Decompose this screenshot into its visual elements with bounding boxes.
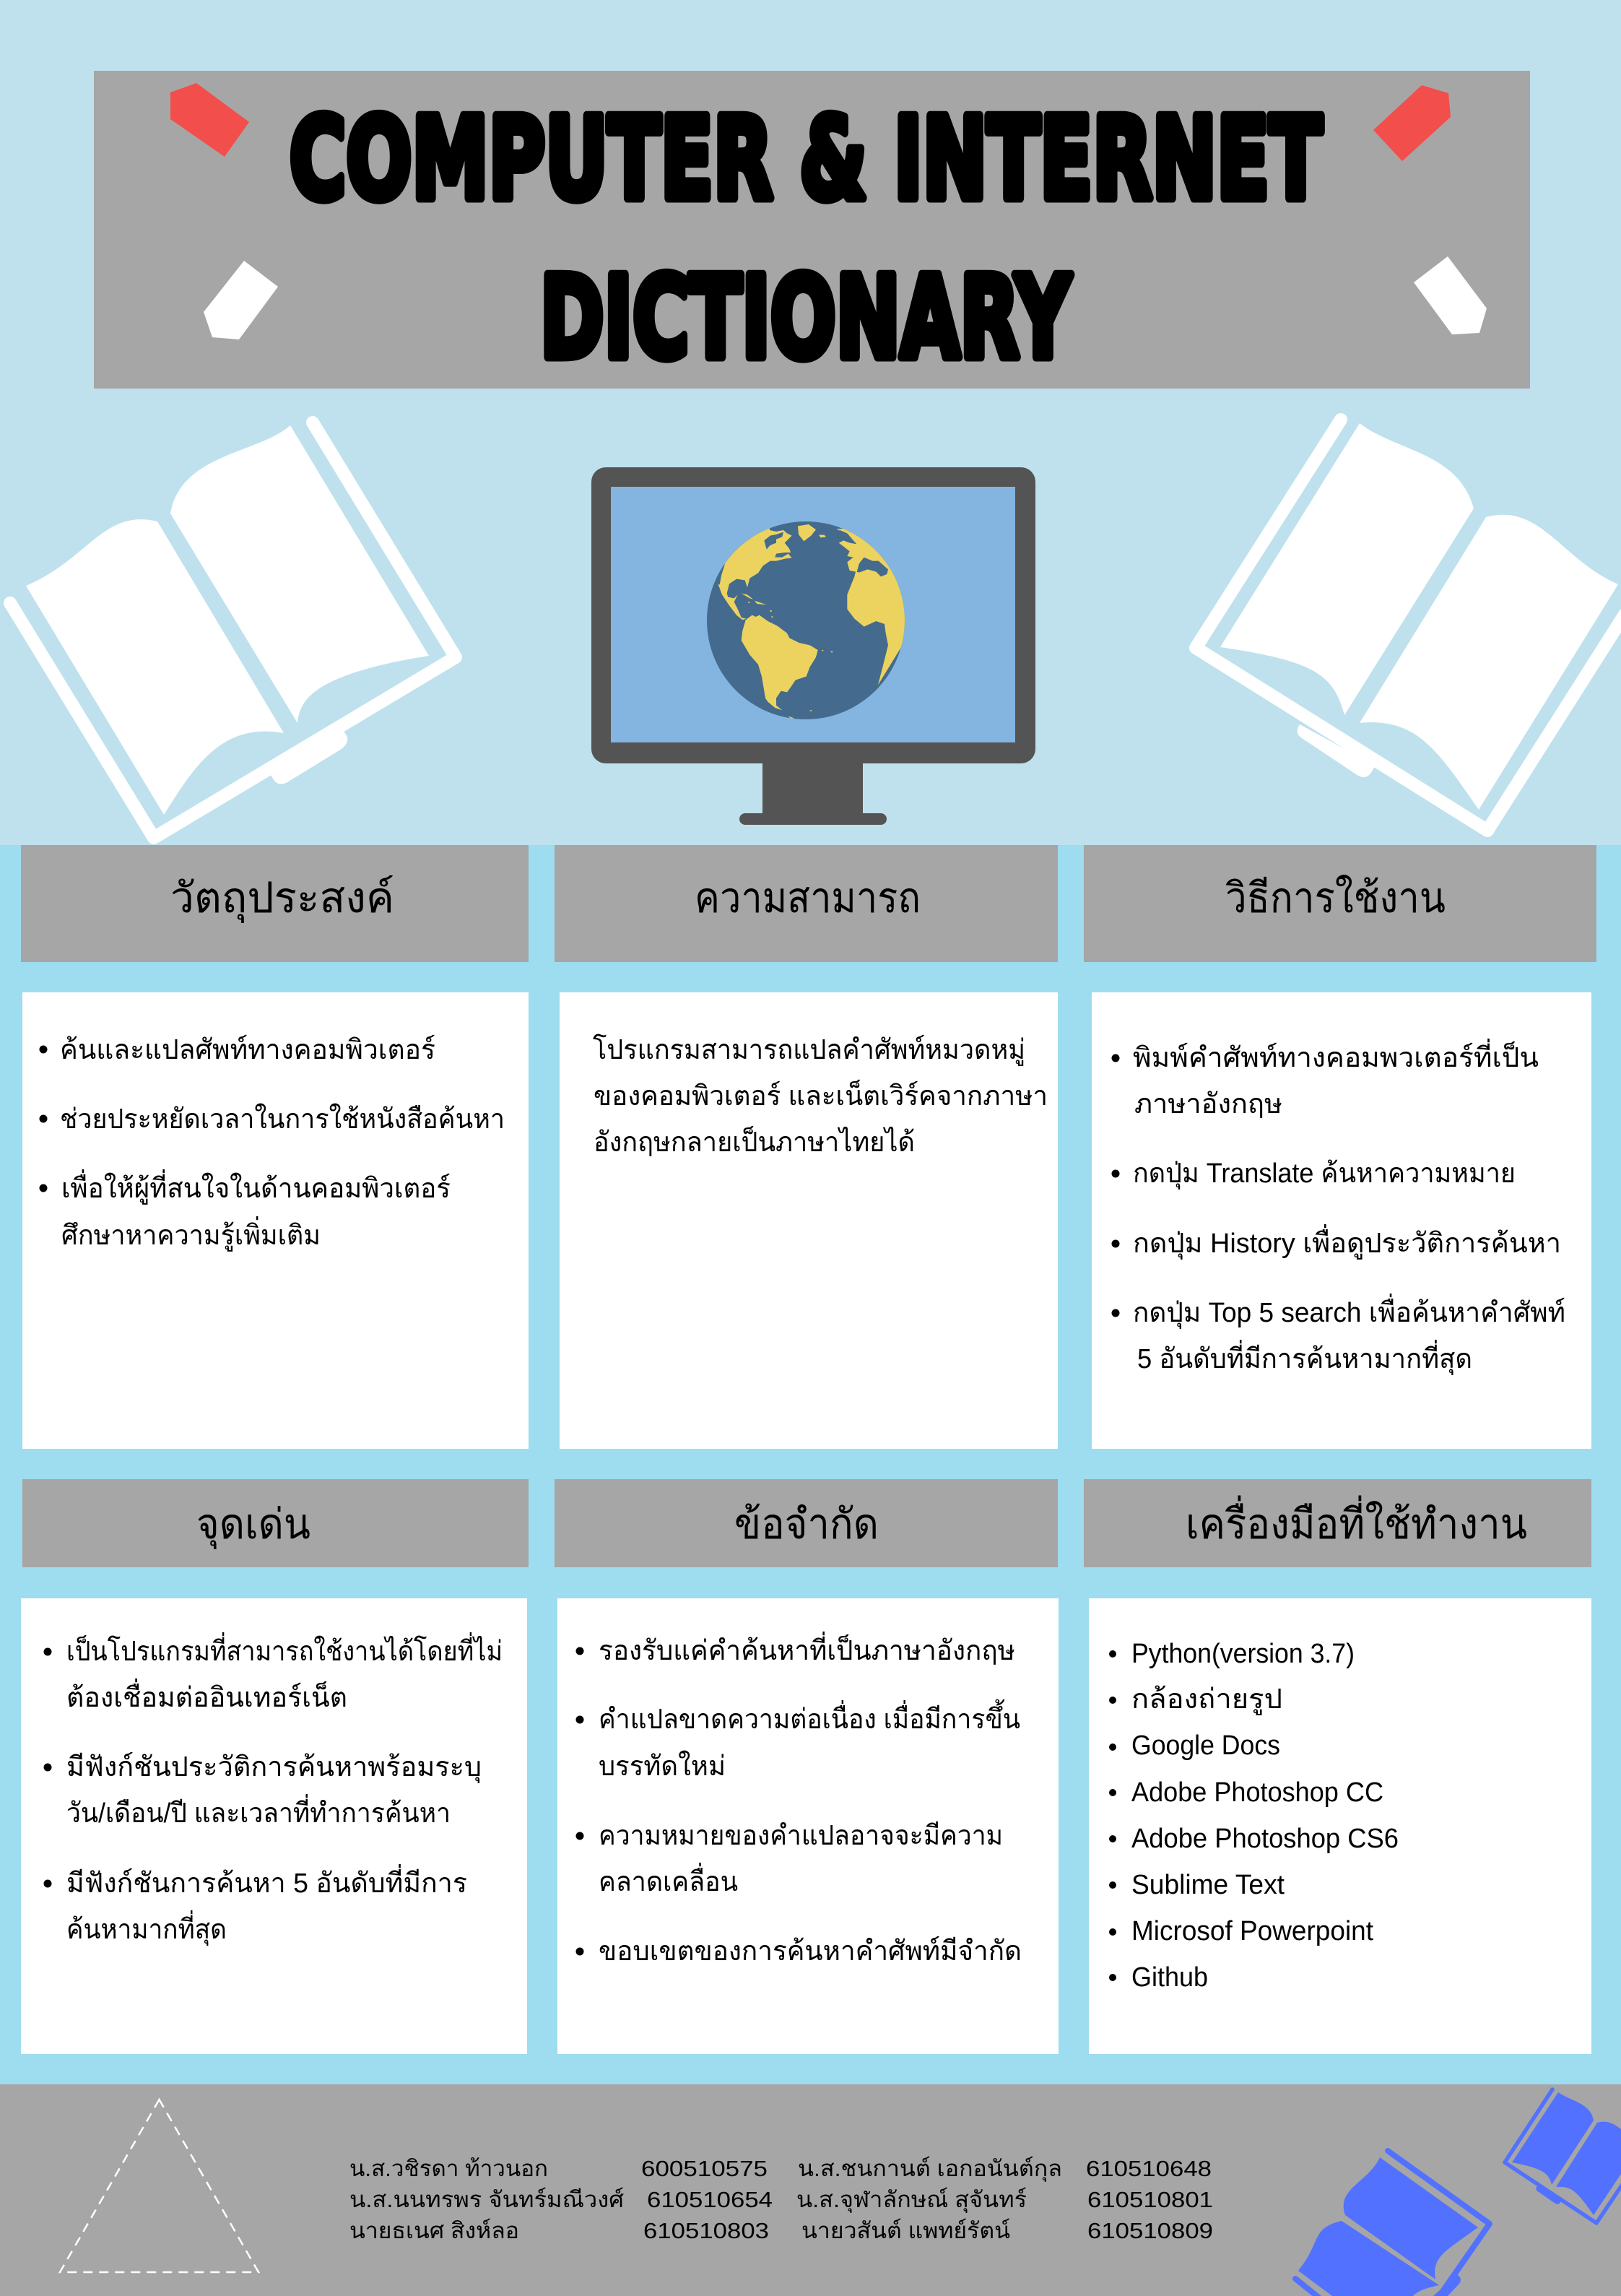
- team members: 610510801: [1087, 2187, 1213, 2212]
- icon: large blue book: [1295, 2151, 1490, 2296]
- panel: highlights: มีฟังก์ชันประวัติการค้นหาพร้อมระบุ: [66, 1751, 482, 1783]
- panel: limitations: รองรับแค่คำค้นหาที่เป็นภาษาอังกฤษ: [599, 1632, 1015, 1666]
- panel: limitations: คลาดเคลื่อน: [599, 1863, 738, 1897]
- panel: usage: กดปุ่ม Translate ค้นหาความหมาย: [1133, 1158, 1516, 1190]
- panel: objectives: ช่วยประหยัดเวลาในการใช้หนังสือค้นหา: [60, 1104, 505, 1135]
- panel: capability: ของคอมพิวเตอร์ และเน็ตเวิร์คจากภาษา: [594, 1079, 1048, 1112]
- icon: red tag left: [170, 83, 249, 157]
- icon: white tag left: [204, 261, 278, 339]
- panel header: usage: [1084, 845, 1596, 962]
- panel: highlights: เป็นโปรแกรมที่สามารถใช้งานได้โดยที่ไม่: [66, 1632, 503, 1667]
- panel header: capability: ความสามารถ: [695, 875, 921, 922]
- panel: highlights: ค้นหามากที่สุด: [66, 1910, 227, 1946]
- panel: tools: Adobe Photoshop CC: [1131, 1777, 1383, 1808]
- icon: white tag right: [1414, 256, 1487, 334]
- icon: red tag right: [1373, 85, 1451, 161]
- panel: tools: กล้องถ่ายรูป: [1131, 1684, 1282, 1715]
- panel: tools: Microsof Powerpoint: [1131, 1916, 1373, 1946]
- panel: capability: อังกฤษกลายเป็นภาษาไทยได้: [594, 1125, 915, 1158]
- panel: highlights: วัน/เดือน/ปี และเวลาที่ทำการค้นหา: [66, 1794, 451, 1829]
- panel: objectives: ค้นและแปลศัพท์ทางคอมพิวเตอร์: [60, 1034, 435, 1065]
- panel header: tools: เครื่องมือที่ใช้ทำงาน: [1186, 1495, 1527, 1548]
- panel header: usage: วิธีการใช้งาน: [1225, 874, 1446, 922]
- team members: นายวสันต์ แพทย์รัตน์: [801, 2218, 1010, 2243]
- panel: tools: [1089, 1598, 1591, 2054]
- title: [290, 93, 1322, 384]
- panel header: highlights: [22, 1479, 529, 1567]
- panel header: objectives: วัตถุประสงค์: [170, 875, 394, 924]
- panel: tools: Adobe Photoshop CS6: [1131, 1824, 1399, 1854]
- panel: limitations: [557, 1598, 1059, 2054]
- icon: small blue book: [1505, 2089, 1621, 2223]
- team members: น.ส.จุฬาลักษณ์ สุจันทร์: [796, 2187, 1027, 2214]
- icon: open book left: [10, 423, 456, 838]
- panel: limitations: ความหมายของคำแปลอาจจะมีความ: [599, 1821, 1003, 1851]
- panel: usage: 5 อันดับที่มีการค้นหามากที่สุด: [1137, 1340, 1472, 1375]
- panel header: capability: [555, 845, 1058, 962]
- panel: highlights: มีฟังก์ชันการค้นหา 5 อันดับที่มีการ: [66, 1864, 467, 1899]
- panel: capability: โปรแกรมสามารถแปลคำศัพท์หมวดหมู่: [593, 1034, 1025, 1066]
- team members: 610510809: [1087, 2218, 1213, 2243]
- panel: usage: [1092, 992, 1591, 1449]
- panel: usage: กดปุ่ม History เพื่อดูประวัติการค้นหา: [1133, 1224, 1561, 1260]
- icon: dashed triangle: [60, 2100, 258, 2272]
- team members: 610510654: [647, 2187, 773, 2212]
- title: DICTIONARY: [540, 252, 1072, 384]
- panel: limitations: บรรทัดใหม่: [599, 1751, 726, 1782]
- panel: usage: ภาษาอังกฤษ: [1134, 1089, 1282, 1119]
- panel header: limitations: ข้อจำกัด: [734, 1501, 879, 1548]
- panel: usage: กดปุ่ม Top 5 search เพื่อค้นหาคำศัพท์: [1133, 1294, 1565, 1329]
- title banner: [94, 71, 1530, 389]
- icon: open book right: [1196, 420, 1621, 831]
- panel: highlights: [21, 1598, 527, 2054]
- panel: objectives: [22, 992, 529, 1449]
- panel: objectives: เพื่อให้ผู้ที่สนใจในด้านคอมพิวเตอร์: [61, 1169, 451, 1205]
- team members: 610510803: [643, 2218, 769, 2243]
- panel: capability: [560, 992, 1058, 1449]
- icon: monitor with globe: [591, 467, 1035, 825]
- footer band: [0, 2084, 1621, 2296]
- panel header: highlights: จุดเด่น: [196, 1501, 310, 1550]
- team members: 600510575: [641, 2156, 768, 2181]
- panel: tools: Github: [1131, 1962, 1208, 1993]
- panel header: tools: [1084, 1479, 1591, 1567]
- team members: 610510648: [1086, 2156, 1212, 2181]
- panel: tools: Sublime Text: [1131, 1870, 1285, 1900]
- panel: limitations: ขอบเขตของการค้นหาคำศัพท์มีจำกัด: [599, 1936, 1022, 1967]
- panel: objectives: ศึกษาหาความรู้เพิ่มเติม: [61, 1216, 321, 1252]
- team members: [349, 2156, 1213, 2243]
- panel: highlights: ต้องเชื่อมต่ออินเทอร์เน็ต: [66, 1678, 347, 1713]
- team members: น.ส.นนทรพร จันทร์มณีวงศ์: [349, 2187, 624, 2212]
- team members: น.ส.วชิรดา ท้าวนอก: [349, 2156, 548, 2181]
- panel: limitations: คำแปลขาดความต่อเนื่อง เมื่อมีการขึ้น: [599, 1699, 1020, 1735]
- panel header: objectives: [21, 845, 529, 962]
- panel header: limitations: [555, 1479, 1058, 1567]
- team members: น.ส.ชนกานต์ เอกอนันต์กุล: [798, 2156, 1062, 2183]
- panel: usage: พิมพ์คำศัพท์ทางคอมพวเตอร์ที่เป็น: [1133, 1039, 1539, 1073]
- team members: นายธเนศ สิงห์ลอ: [349, 2218, 519, 2243]
- panel: tools: Google Docs: [1131, 1730, 1280, 1761]
- icon: globe: [707, 521, 910, 719]
- panel: tools: Python(version 3.7): [1131, 1639, 1355, 1669]
